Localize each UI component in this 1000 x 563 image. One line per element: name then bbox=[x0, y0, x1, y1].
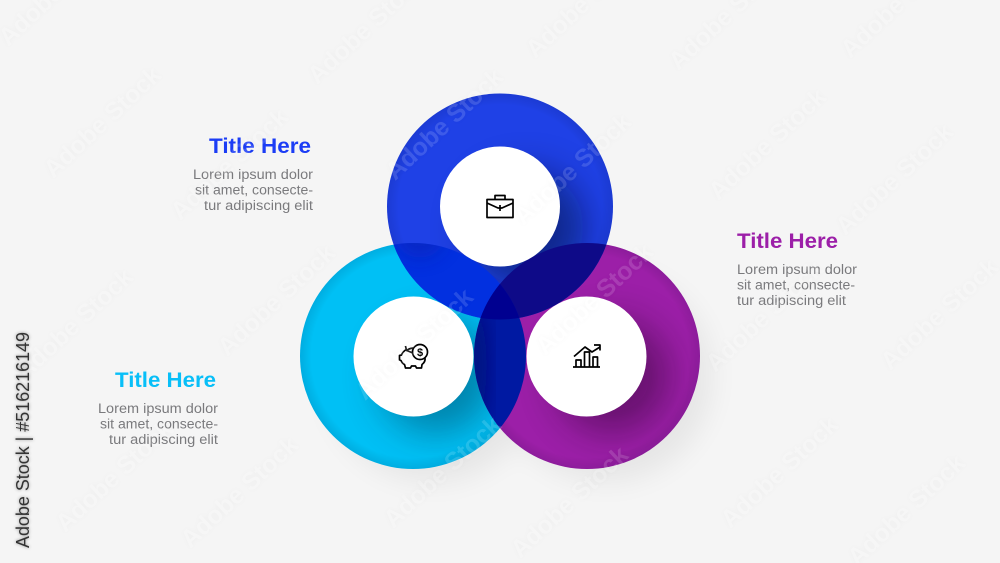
inner circle: left bbox=[354, 296, 474, 416]
watermark: repeated diagonal stock text: Adobe Stock bbox=[175, 431, 304, 554]
stock id label: vertical: Adobe Stock | #516216149 bbox=[13, 332, 33, 548]
watermark: repeated diagonal stock text: Adobe Stock bbox=[715, 411, 844, 534]
watermark: repeated diagonal stock text: Adobe Stock bbox=[165, 103, 294, 226]
icon: bar chart with rising arrow bbox=[573, 345, 600, 367]
inner circle: right bbox=[526, 296, 646, 416]
body text: purple item bbox=[737, 262, 858, 308]
watermark: repeated diagonal stock text: Adobe Stock bbox=[10, 263, 139, 386]
watermark: repeated diagonal stock text: Adobe Stock bbox=[505, 441, 634, 563]
watermark: repeated diagonal stock text: Adobe Stock bbox=[830, 118, 959, 241]
watermark: repeated diagonal stock text: Adobe Stock bbox=[38, 61, 167, 184]
body text: blue item: tur adipiscing elit bbox=[204, 198, 313, 213]
body text: cyan item bbox=[98, 401, 219, 447]
watermark: repeated diagonal stock text: Adobe Stock bbox=[50, 415, 179, 538]
body text: blue item: Lorem ipsum dolor bbox=[193, 167, 314, 182]
inner circle: top bbox=[440, 146, 560, 266]
watermark: repeated diagonal stock text: Adobe Stock bbox=[380, 63, 509, 186]
body text: cyan item: sit amet, consecte- bbox=[100, 416, 218, 432]
body text: blue item bbox=[193, 167, 314, 213]
icon: piggy bank with dollar coin: $ bbox=[417, 347, 423, 359]
watermark: repeated diagonal stock text: Adobe Stock bbox=[350, 283, 479, 406]
overlap: purple and blue bbox=[480, 243, 606, 318]
soft drop shadows under circles bbox=[326, 270, 712, 482]
text block: blue item bbox=[193, 135, 314, 213]
watermark: repeated diagonal stock text: Adobe Stock bbox=[212, 239, 341, 362]
title: cyan: Title Here bbox=[115, 369, 216, 392]
watermark: repeated diagonal stock text: Adobe Stock bbox=[700, 255, 829, 378]
circle: cyan ring bbox=[300, 244, 500, 469]
watermark: repeated diagonal stock text: Adobe Stock bbox=[508, 108, 637, 231]
body text: cyan item: Lorem ipsum dolor bbox=[98, 401, 219, 416]
text block: cyan item bbox=[98, 369, 219, 447]
text block: purple item bbox=[737, 230, 858, 308]
icon: briefcase bbox=[487, 196, 513, 218]
watermark: repeated diagonal stock text: Adobe Stock bbox=[703, 83, 832, 206]
title: purple: Title Here bbox=[737, 230, 838, 253]
circle: blue ring bbox=[387, 93, 613, 320]
title: blue: Title Here bbox=[209, 135, 311, 158]
body text: blue item: sit amet, consecte- bbox=[195, 182, 313, 198]
icon: piggy bank with dollar coin bbox=[400, 344, 428, 368]
watermark: repeated diagonal stock text: Adobe Stock bbox=[378, 411, 507, 534]
body text: purple item: sit amet, consecte- bbox=[737, 278, 855, 292]
venn diagram of three circles bbox=[300, 93, 700, 469]
overlap: centre of all three bbox=[480, 284, 520, 320]
body text: purple item: tur adipiscing elit bbox=[737, 293, 846, 308]
watermark: repeated diagonal stock text: Adobe Stock bbox=[530, 238, 659, 361]
overlap: cyan and purple bbox=[474, 302, 526, 428]
body text: purple item: Lorem ipsum dolor bbox=[737, 262, 858, 277]
body text: cyan item: tur adipiscing elit bbox=[109, 432, 218, 447]
overlap: cyan and blue bbox=[394, 243, 500, 318]
circle: purple ring bbox=[474, 243, 700, 469]
